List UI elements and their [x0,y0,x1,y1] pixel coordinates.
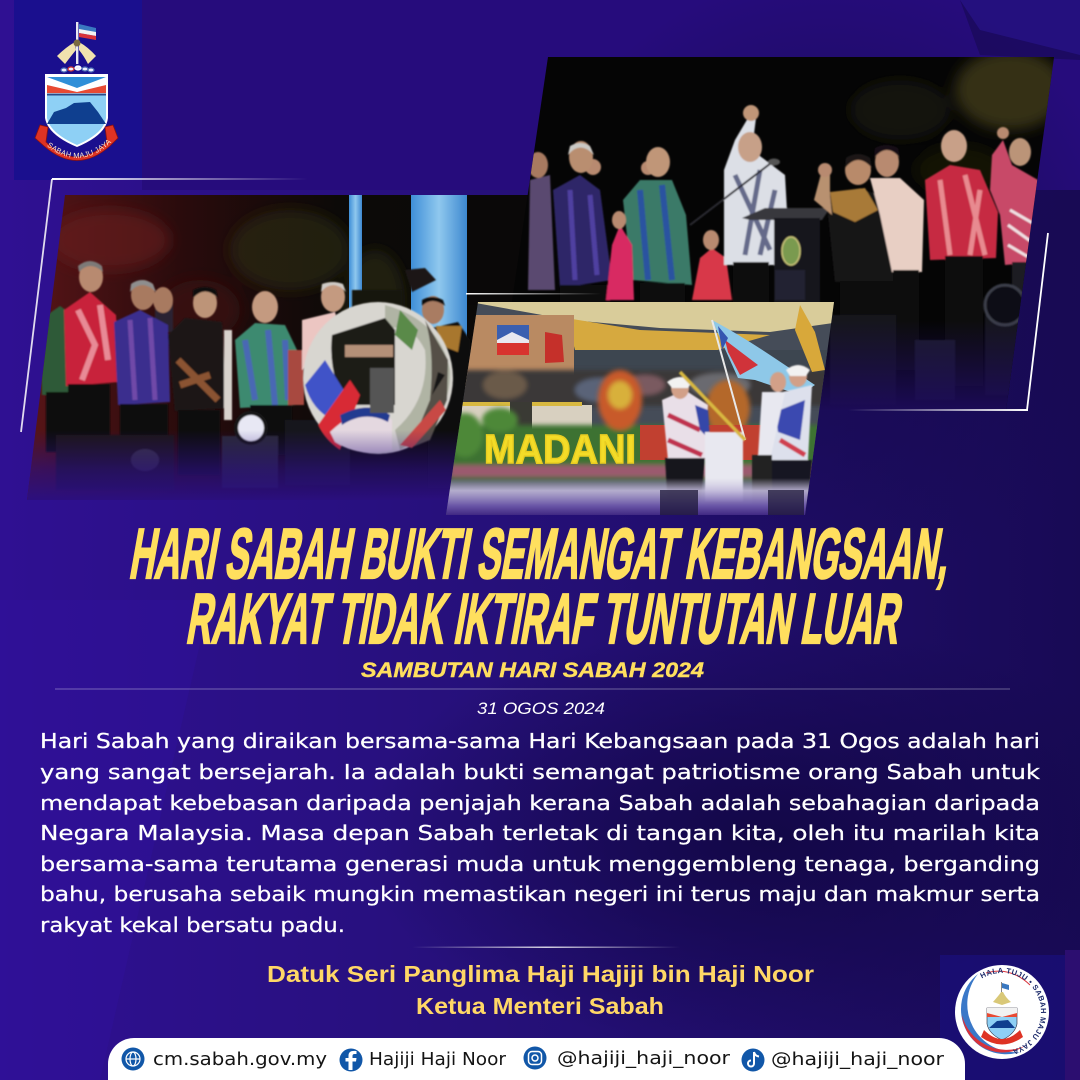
frame line: left photo [21,178,308,432]
panel: logo backdrop [14,0,142,180]
sign: MADANI: MADANI [484,426,636,472]
icon: facebook [340,1048,362,1072]
tiktok handle: @hajiji_haji_noor [771,1049,945,1070]
title [125,514,957,659]
divider: signature [412,946,680,948]
frame line: right photo [848,233,1048,411]
icon: Sabah coat of arms [34,22,118,161]
flag [712,320,815,395]
body text [40,729,1040,937]
subtitle: SAMBUTAN HARI SABAH 2024 [361,659,704,682]
globe [303,302,453,454]
icon: instagram [524,1046,546,1070]
website url: cm.sabah.gov.my [153,1049,327,1070]
divider [55,688,1010,690]
icon: tiktok [742,1048,764,1072]
icon: Sabah coat of arms: SABAH MAJU JAYA [48,140,112,158]
body text: Negara Malaysia. Masa depan Sabah terletak di tangan kita, oleh itu marilah kita [40,821,1040,845]
body text: yang sangat bersejarah. Ia adalah bukti semangat patriotisme orang Sabah untuk [40,760,1040,784]
body text: mendapat kebebasan daripada penjajah kerana Sabah adalah sebahagian daripada [40,791,1040,815]
instagram handle: @hajiji_haji_noor [557,1048,731,1069]
body text: rakyat kekal bersatu padu. [40,913,345,937]
photo: parade with MADANI sign [440,300,840,520]
body text: bersama-sama terutama generasi muda untuk menggembleng tenaga, berganding [40,852,1040,876]
icon: website [122,1048,144,1070]
photo: stage leaders with globe [20,190,550,510]
signature name: Datuk Seri Panglima Haji Hajiji bin Haji Noor [267,961,814,987]
frame line: mid photo top [466,293,601,294]
footer pill [108,1038,965,1080]
icon: Hala Tuju round badge: HALA TUJU • SABAH MAJU JAYA [980,968,1046,1054]
signature role: Ketua Menteri Sabah [416,993,664,1019]
facebook name: Hajiji Haji Noor [369,1049,507,1070]
body text: bahu, berusaha sebaik mungkin memastikan negeri ini terus maju dan makmur serta [40,882,1040,906]
date: 31 OGOS 2024 [477,699,605,718]
body text: Hari Sabah yang diraikan bersama-sama Hari Kebangsaan pada 31 Ogos adalah hari [40,729,1040,753]
photo: raising fists on stage [527,57,1054,409]
